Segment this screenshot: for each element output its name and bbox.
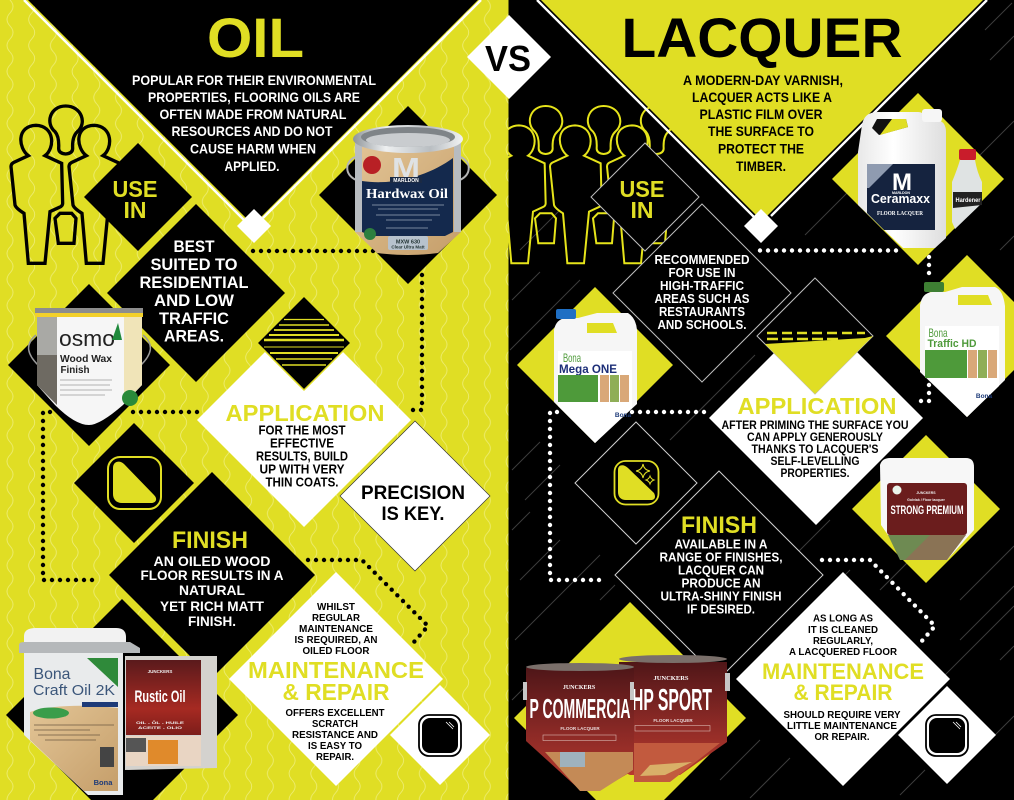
panel: lacquer side background xyxy=(508,0,1014,800)
diamond: lacquer application: PROPERTIES. xyxy=(780,468,850,480)
product: ceramaxx and hardener: Ceramaxx xyxy=(871,192,930,206)
diamond: oil maintenance and repair: REPAIR. xyxy=(316,751,354,763)
diamond: lacquer finish: RANGE OF FINISHES, xyxy=(660,550,782,564)
diamond: oil best suited: AND LOW xyxy=(154,291,235,310)
diamond: lacquer maintenance and repair: IT IS CLEANED xyxy=(808,624,878,636)
product: osmo wood wax finish can xyxy=(8,284,170,446)
title: lacquer: LACQUER xyxy=(622,6,902,69)
diamond: oil finish: FINISH. xyxy=(188,614,236,629)
diamond: lacquer recommended xyxy=(613,204,791,382)
diamond: oil finish: AN OILED WOOD xyxy=(154,554,271,569)
diamond: lacquer maintenance and repair: MAINTENANCE xyxy=(762,659,924,684)
product: strong premium: Golvlak / Floor lacquer xyxy=(907,498,946,502)
diamond: lacquer recommended: FOR USE IN xyxy=(668,266,736,280)
diamond: lacquer recommended: RESTAURANTS xyxy=(659,305,745,319)
diamond: oil application: RESULTS, BUILD xyxy=(256,450,348,464)
diamond: oil maintenance and repair: OFFERS EXCELLENT xyxy=(286,707,385,719)
text: lacquer intro: A MODERN-DAY VARNISH, xyxy=(683,72,843,88)
icon: oil repair scratch xyxy=(390,685,490,785)
diamond: lacquer application xyxy=(709,311,923,525)
diamond: lacquer application: CAN APPLY GENEROUSLY xyxy=(747,432,883,444)
diamond: oil application: THIN COATS. xyxy=(266,476,338,490)
product: bona mega one: Bona xyxy=(563,351,581,365)
diamond: lacquer application: AFTER PRIMING THE SURFACE YOU xyxy=(722,420,908,432)
text: oil intro: POPULAR FOR THEIR ENVIRONMENTAL xyxy=(132,72,376,88)
diamond: oil best suited xyxy=(107,204,285,382)
product: osmo wood wax finish can: Wood Wax xyxy=(60,354,112,365)
text: lacquer intro xyxy=(683,72,843,174)
badge: vs: VS xyxy=(485,38,531,79)
diamond: oil maintenance and repair: RESISTANCE AND xyxy=(292,729,378,741)
diamond: lacquer application: SELF-LEVELLING xyxy=(770,456,860,468)
product: osmo wood wax finish can: Finish xyxy=(60,365,90,376)
product: hp commercial and hp sport cans: FLOOR LACQUER xyxy=(653,718,693,723)
text: oil intro: PROPERTIES, FLOORING OILS ARE xyxy=(148,89,360,105)
product: bona traffic hd xyxy=(886,255,1014,417)
diamond: lacquer application: THANKS TO LACQUER'S xyxy=(752,444,879,456)
product: ceramaxx and hardener: M xyxy=(892,169,912,196)
diamond: lacquer use in: USE xyxy=(620,176,664,202)
dotted connector: oil xyxy=(43,251,428,642)
diamond: lacquer finish: FINISH xyxy=(681,512,757,539)
diamond: oil finish: FLOOR RESULTS IN A xyxy=(140,568,284,583)
product: bona mega one: Bona xyxy=(615,412,632,419)
diamond: precision is key xyxy=(340,421,490,571)
diamond: oil use in xyxy=(84,143,192,251)
panel: lacquer intro triangle xyxy=(537,0,987,221)
product: hp commercial and hp sport cans: P COMMERCIA xyxy=(530,693,630,724)
diamond: lacquer maintenance and repair: A LACQUERED FLOOR xyxy=(789,646,897,658)
product: bona craft oil and rustic oil xyxy=(6,599,238,800)
icon: people silhouettes (lacquer) xyxy=(494,106,673,263)
product: bona mega one: Mega ONE xyxy=(559,362,617,376)
product: ceramaxx and hardener: FLOOR LACQUER xyxy=(877,211,924,217)
product: bona craft oil and rustic oil: OIL - ÖL - HUILE xyxy=(136,720,185,725)
diamond: oil application: FOR THE MOST xyxy=(258,424,346,438)
product: bona craft oil and rustic oil: Bona xyxy=(94,778,113,787)
product: hp commercial and hp sport cans: FLOOR LACQUER xyxy=(560,726,600,731)
diamond: oil maintenance and repair: MAINTENANCE xyxy=(248,657,424,683)
diamond: lacquer finish xyxy=(615,471,823,679)
product: hardwax oil can: Hardwax Oil xyxy=(366,187,448,202)
diamond: lacquer finish: LACQUER CAN xyxy=(678,564,764,578)
diamond: oil finish: FINISH xyxy=(172,527,248,554)
diamond: lacquer maintenance and repair: LITTLE MAINTENANCE xyxy=(787,720,897,732)
icon: oil thin coat stripes xyxy=(257,296,351,390)
diamond: oil maintenance and repair xyxy=(229,572,443,786)
diamond: lacquer maintenance and repair: REGULARLY, xyxy=(813,635,873,647)
diamond: lacquer use in xyxy=(591,143,699,251)
product: bona mega one xyxy=(517,287,673,443)
product: ceramaxx and hardener: MARLDON xyxy=(892,191,910,195)
diamond: oil finish xyxy=(109,472,315,678)
badge: vs xyxy=(467,15,551,99)
icon: people silhouettes (oil) xyxy=(11,106,121,263)
diamond: oil use in: USE xyxy=(112,176,158,202)
diamond: lacquer finish icon xyxy=(575,422,697,544)
product: hp commercial and hp sport cans: JUNCKERS xyxy=(653,675,689,682)
diamond: oil maintenance and repair: IS REQUIRED, AN xyxy=(294,634,378,646)
icon: lacquer repair scratch xyxy=(898,686,996,784)
diamond: lacquer maintenance and repair xyxy=(736,572,950,786)
product: bona traffic hd: Traffic HD xyxy=(928,338,977,350)
product: hp commercial and hp sport cans: JUNCKERS xyxy=(563,685,596,691)
diamond: oil best suited: TRAFFIC xyxy=(159,309,229,328)
diamond: oil finish: YET RICH MATT xyxy=(160,599,265,614)
diamond: oil best suited: RESIDENTIAL xyxy=(140,273,248,292)
product: bona craft oil and rustic oil: ACEITE - OLIO xyxy=(138,726,182,730)
diamond: oil maintenance and repair: WHILST xyxy=(317,601,356,613)
product: bona craft oil and rustic oil: Craft Oil 2K xyxy=(33,682,115,699)
text: oil intro: CAUSE HARM WHEN xyxy=(190,140,316,156)
diamond: lacquer recommended: RECOMMENDED xyxy=(654,253,750,267)
product: hardwax oil can: Clear Ultra Matt xyxy=(391,244,425,250)
diamond: oil maintenance and repair: SCRATCH xyxy=(312,718,358,730)
diamond: lacquer recommended: AREAS SUCH AS xyxy=(654,292,750,306)
diamond: lacquer use in: IN xyxy=(630,197,654,223)
text: lacquer intro: PROTECT THE xyxy=(718,140,804,156)
panel: oil intro triangle xyxy=(24,0,481,225)
diamond: oil best suited: BEST xyxy=(174,237,215,256)
product: hardwax oil can: MXW 630 xyxy=(396,240,420,246)
diamond: oil best suited: SUITED TO xyxy=(150,255,238,274)
diamond: oil maintenance and repair: REGULAR xyxy=(312,612,360,624)
product: strong premium xyxy=(852,435,1000,583)
diamond: oil best suited: AREAS. xyxy=(164,326,224,346)
diamond: lacquer finish: IF DESIRED. xyxy=(687,602,755,616)
text: oil intro xyxy=(132,72,376,174)
product: bona traffic hd: Bona xyxy=(928,326,948,340)
product: hardwax oil can: MARLDON xyxy=(393,178,419,184)
marker: oil start diamond xyxy=(237,209,271,243)
diamond: oil application: EFFECTIVE xyxy=(270,437,334,451)
dotted connector: lacquer xyxy=(550,250,935,642)
product: strong premium: JUNCKERS xyxy=(916,491,936,495)
diamond: oil maintenance and repair: OILED FLOOR xyxy=(302,645,370,657)
title: oil: OIL xyxy=(207,6,304,69)
diamond: oil maintenance and repair: & REPAIR xyxy=(282,679,390,705)
icon: lacquer self-levelling coat xyxy=(757,278,873,394)
product: bona craft oil and rustic oil: JUNCKERS xyxy=(148,669,172,674)
product: hp commercial and hp sport cans xyxy=(514,602,746,800)
diamond: lacquer application: APPLICATION xyxy=(738,393,896,419)
text: oil intro: OFTEN MADE FROM NATURAL xyxy=(160,106,347,122)
diamond: lacquer finish: AVAILABLE IN A xyxy=(674,538,768,552)
diamond: lacquer maintenance and repair: OR REPAIR. xyxy=(814,731,870,743)
diamond: lacquer maintenance and repair: & REPAIR xyxy=(794,680,893,705)
product: ceramaxx and hardener xyxy=(832,93,1004,265)
diamond: oil use in: IN xyxy=(124,197,146,223)
diamond: lacquer recommended: AND SCHOOLS. xyxy=(658,318,746,332)
diamond: oil finish: NATURAL xyxy=(179,583,245,598)
diamond: precision is key: IS KEY. xyxy=(382,503,444,525)
text: lacquer intro: LACQUER ACTS LIKE A xyxy=(692,89,832,105)
product: ceramaxx and hardener: Hardener xyxy=(956,197,981,204)
diamond: oil maintenance and repair: IS EASY TO xyxy=(308,740,362,752)
product: bona craft oil and rustic oil: Rustic Oil xyxy=(134,687,186,706)
text: lacquer intro: TIMBER. xyxy=(736,158,786,174)
product: osmo wood wax finish can: osmo xyxy=(59,326,115,351)
product: strong premium: STRONG PREMIUM xyxy=(890,503,964,517)
diamond: oil maintenance and repair: MAINTENANCE xyxy=(299,623,373,635)
diamond: lacquer recommended: HIGH-TRAFFIC xyxy=(660,279,744,293)
text: lacquer intro: THE SURFACE TO xyxy=(708,123,814,139)
diamond: precision is key: PRECISION xyxy=(361,482,465,504)
diamond: lacquer maintenance and repair: SHOULD REQUIRE VERY xyxy=(784,709,900,721)
panel: oil side background xyxy=(0,0,509,800)
text: oil intro: APPLIED. xyxy=(224,158,280,174)
product: hp commercial and hp sport cans: HP SPORT xyxy=(632,682,712,717)
diamond: oil application: APPLICATION xyxy=(226,400,384,426)
diamond: oil finish icon xyxy=(74,423,194,543)
diamond: lacquer finish: ULTRA-SHINY FINISH xyxy=(660,590,782,604)
text: oil intro: RESOURCES AND DO NOT xyxy=(172,123,333,139)
diamond: oil application: UP WITH VERY xyxy=(260,463,345,477)
diamond: lacquer finish: PRODUCE AN xyxy=(682,576,760,590)
product: hardwax oil can: M xyxy=(392,153,420,185)
diamond: oil application xyxy=(197,313,411,527)
product: bona craft oil and rustic oil: Bona xyxy=(34,666,71,683)
text: lacquer intro: PLASTIC FILM OVER xyxy=(700,106,822,122)
marker: lacquer start diamond xyxy=(744,209,778,243)
product: hardwax oil can xyxy=(319,106,497,284)
diamond: lacquer maintenance and repair: AS LONG AS xyxy=(813,613,873,625)
product: bona traffic hd: Bona xyxy=(976,393,993,400)
